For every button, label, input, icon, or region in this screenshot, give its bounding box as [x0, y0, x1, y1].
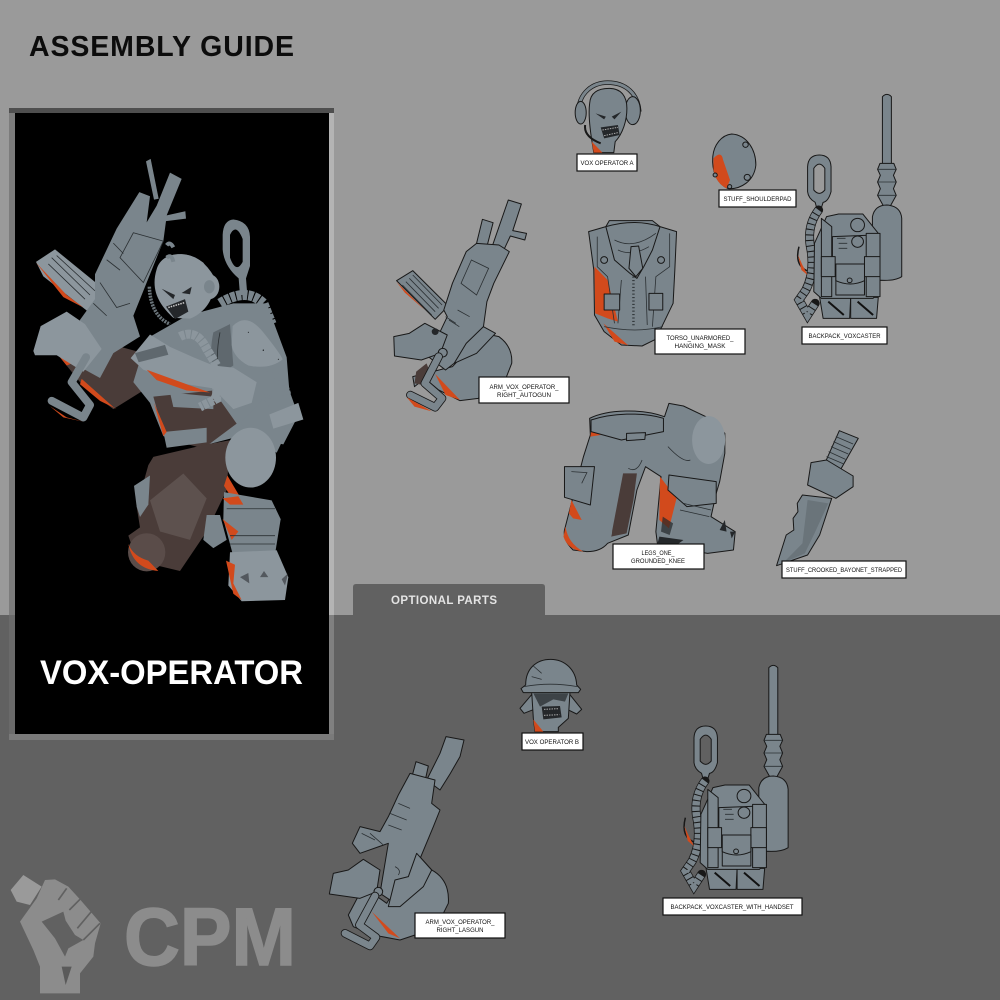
label: torso: TORSO_UNARMORED_ [666, 335, 734, 342]
ring and cable [223, 220, 250, 295]
label: torso [655, 329, 745, 354]
panel caption: VOX-OPERATOR [40, 654, 303, 692]
label: bayonet: STUFF_CROOKED_BAYONET_STRAPPED [786, 567, 902, 574]
wordmark: CPM [124, 892, 296, 983]
label: arm autogun [479, 377, 569, 403]
figure: vox-operator miniature [33, 159, 303, 601]
label: backpack voxcaster: BACKPACK_VOXCASTER [808, 333, 881, 340]
background: upper light area [0, 0, 1000, 615]
part: torso [589, 221, 677, 346]
label: vox operator B: VOX OPERATOR B [525, 739, 579, 746]
headset [199, 274, 219, 299]
shoulder pad [232, 320, 283, 367]
part: head B [520, 659, 582, 732]
part: voxcaster backpack [798, 94, 902, 318]
label: legs: GROUNDED_KNEE [631, 558, 685, 565]
title: ASSEMBLY GUIDE [29, 31, 294, 63]
dark thigh [128, 440, 230, 571]
shin and boot [223, 492, 281, 556]
part: right arm with lasgun [329, 737, 464, 946]
rear foot [128, 533, 165, 571]
label: arm autogun: RIGHT_AUTOGUN [497, 392, 551, 399]
part: shoulder pad [713, 134, 756, 189]
label: arm lasgun: RIGHT_LASGUN [436, 927, 484, 934]
label: backpack with handset [663, 898, 802, 915]
label: torso: HANGING_MASK [674, 343, 726, 350]
label: legs: LEGS_ONE_ [642, 550, 675, 557]
label: arm lasgun [415, 913, 505, 938]
label: legs [613, 544, 704, 569]
background: lower dark area [0, 615, 1000, 1000]
logo: CPM fist [11, 875, 296, 993]
label: vox operator A [577, 154, 637, 171]
back aerial [146, 159, 159, 200]
label: backpack with handset: BACKPACK_VOXCASTER_WITH_HANDSET [670, 904, 794, 911]
tab: optional parts: OPTIONAL PARTS [391, 595, 497, 607]
rifle [36, 249, 103, 316]
label: arm autogun: ARM_VOX_OPERATOR_ [490, 384, 559, 391]
label: shoulderpad [719, 190, 796, 207]
torso [133, 303, 298, 446]
head [155, 254, 214, 319]
part: head A [575, 83, 640, 153]
knee [225, 428, 276, 488]
chest belts [153, 390, 237, 449]
chains [180, 334, 217, 407]
label: shoulderpad: STUFF_SHOULDERPAD [724, 196, 792, 203]
label: arm lasgun: ARM_VOX_OPERATOR_ [426, 919, 495, 926]
icon: raised fist [11, 875, 101, 993]
tab: optional parts [353, 584, 545, 615]
label: bayonet [782, 561, 906, 578]
dark rear arm [58, 345, 157, 409]
handset arm [131, 334, 257, 409]
part: right arm with autogun [394, 200, 527, 411]
label: vox operator A: VOX OPERATOR A [580, 160, 634, 167]
label: vox operator B [522, 733, 583, 750]
part: voxcaster backpack with handset [684, 665, 788, 889]
label: backpack voxcaster [802, 327, 887, 344]
part: bayonet [777, 431, 858, 566]
panel: main figure card [9, 108, 334, 740]
hip pack and tool [240, 399, 287, 453]
part: legs [563, 403, 735, 553]
